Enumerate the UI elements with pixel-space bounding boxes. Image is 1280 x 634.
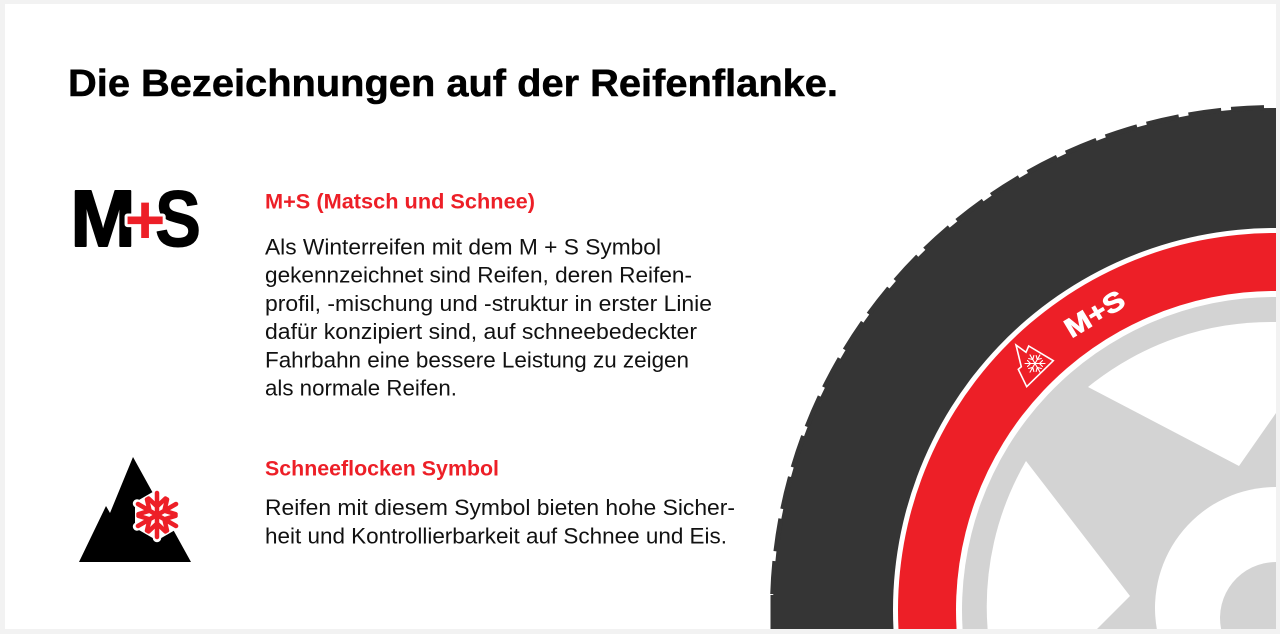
sidewall marking: M+S: M+S bbox=[1059, 284, 1130, 344]
text block: M+S description: Fahrbahn eine bessere Leistung zu zeigen bbox=[265, 347, 689, 372]
tire tread bbox=[770, 108, 1276, 629]
icon: M+S logo: + bbox=[125, 181, 165, 259]
heading: M+S: M+S (Matsch und Schnee) bbox=[265, 190, 535, 214]
icon: snowflake bbox=[134, 492, 180, 538]
icon: M+S logo: S bbox=[155, 174, 201, 263]
heading: Schneeflocken Symbol: Schneeflocken Symbol bbox=[265, 458, 499, 481]
text block: M+S description bbox=[265, 234, 712, 400]
text block: M+S description: Als Winterreifen mit dem M + S Symbol bbox=[265, 234, 661, 260]
sidewall marking: snowflake symbol bbox=[1016, 345, 1053, 387]
sidewall white line bbox=[893, 228, 1276, 629]
icon: mountain with snowflake bbox=[79, 457, 191, 562]
red sidewall band bbox=[898, 233, 1276, 629]
icon: M+S logo: M bbox=[70, 174, 136, 263]
wheel rim bbox=[962, 297, 1276, 629]
icon: M+S logo bbox=[70, 174, 201, 263]
tire illustration bbox=[770, 108, 1276, 629]
text block: Schneeflocken description bbox=[265, 495, 735, 548]
text block: M+S description: als normale Reifen. bbox=[265, 376, 457, 400]
text block: Schneeflocken description: heit und Kontrollierbarkeit auf Schnee und Eis. bbox=[265, 523, 727, 548]
text block: M+S description: gekennzeichnet sind Reifen, deren Reifen- bbox=[265, 263, 692, 288]
text block: M+S description: dafür konzipiert sind, auf schneebedeckter bbox=[265, 319, 697, 344]
text block: Schneeflocken description: Reifen mit diesem Symbol bieten hohe Sicher- bbox=[265, 495, 735, 520]
text block: M+S description: profil, -mischung und -struktur in erster Linie bbox=[265, 291, 712, 316]
title: Die Bezeichnungen auf der Reifenflanke. bbox=[68, 63, 838, 105]
